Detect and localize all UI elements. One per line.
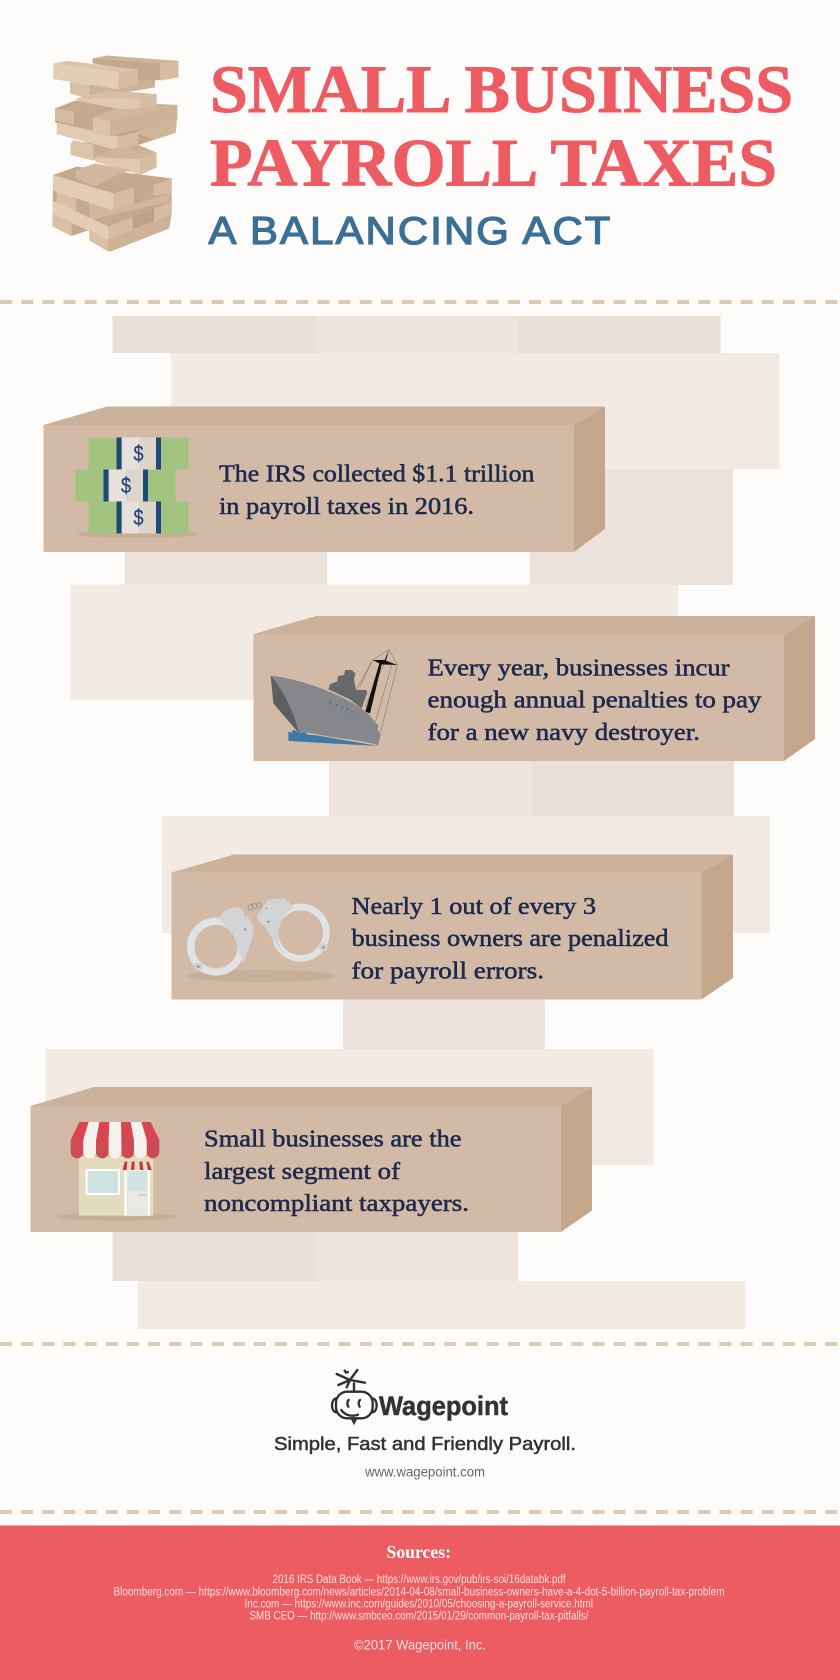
- text: penalties statistic: Every year, businesses incur: [428, 654, 730, 682]
- background block tower: [46, 316, 780, 1329]
- title: [210, 51, 793, 200]
- panel: noncompliant taxpayers block: [30, 1087, 592, 1232]
- title: PAYROLL TAXES: [210, 124, 777, 200]
- text: penalized statistic: [352, 893, 668, 984]
- sources list: Inc.com — https://www.inc.com/guides/2010/05/choosing-a-payroll-service.html: [244, 1598, 593, 1610]
- title: SMALL BUSINESS: [210, 51, 793, 127]
- text: penalized statistic: business owners are penalized: [352, 925, 668, 952]
- text: penalized statistic: Nearly 1 out of every 3: [352, 893, 596, 920]
- sources list: [114, 1574, 724, 1622]
- icon: stack of money: $: [134, 441, 144, 466]
- text: penalties statistic: [428, 654, 762, 746]
- logo: Wagepoint: Wagepoint: [379, 1391, 508, 1421]
- sources heading: Sources:: [386, 1542, 451, 1562]
- tagline: Simple, Fast and Friendly Payroll.: [274, 1434, 576, 1454]
- panel: IRS payroll tax block: [44, 406, 605, 552]
- text: penalties statistic: for a new navy destroyer.: [428, 719, 700, 746]
- icon: sinking ship: [271, 649, 397, 746]
- icon: stack of money: $: [121, 473, 131, 498]
- panel: payroll errors block: [172, 854, 733, 1000]
- text: noncompliant statistic: Small businesses are the: [204, 1126, 462, 1152]
- website url: www.wagepoint.com: [364, 1464, 485, 1480]
- text: noncompliant statistic: largest segment of: [204, 1158, 401, 1185]
- text: IRS statistic: [219, 460, 534, 520]
- icon: storefront: [57, 1122, 178, 1221]
- sources list: Bloomberg.com — https://www.bloomberg.com/news/articles/2014-04-08/small-business-owners-have-a-4-dot-5-billion-payroll-tax-problem: [114, 1586, 724, 1598]
- subtitle: A BALANCING ACT: [208, 210, 612, 253]
- sources list: 2016 IRS Data Book — https://www.irs.gov/pub/irs-soi/16databk.pdf: [272, 1574, 566, 1586]
- sources list: SMB CEO — http://www.smbceo.com/2015/01/29/common-payroll-tax-pitfalls/: [250, 1610, 589, 1622]
- footer: sources panel: [0, 1526, 840, 1680]
- text: penalized statistic: for payroll errors.: [352, 958, 544, 984]
- icon: handcuffs: [187, 898, 335, 982]
- panel: navy destroyer block: [254, 616, 815, 761]
- icon: stack of money: $: [134, 505, 144, 530]
- icon: stack of money: [76, 438, 199, 538]
- text: noncompliant statistic: noncompliant taxpayers.: [204, 1190, 469, 1217]
- copyright: ©2017 Wagepoint, Inc.: [354, 1637, 486, 1652]
- icon: jenga tower: [53, 56, 178, 252]
- text: noncompliant statistic: [204, 1126, 469, 1217]
- logo: Wagepoint: [332, 1370, 508, 1423]
- text: penalties statistic: enough annual penalties to pay: [428, 686, 762, 714]
- text: IRS statistic: The IRS collected $1.1 trillion: [219, 460, 534, 488]
- icon: Wagepoint mascot: [332, 1370, 377, 1423]
- text: IRS statistic: in payroll taxes in 2016.: [219, 493, 474, 520]
